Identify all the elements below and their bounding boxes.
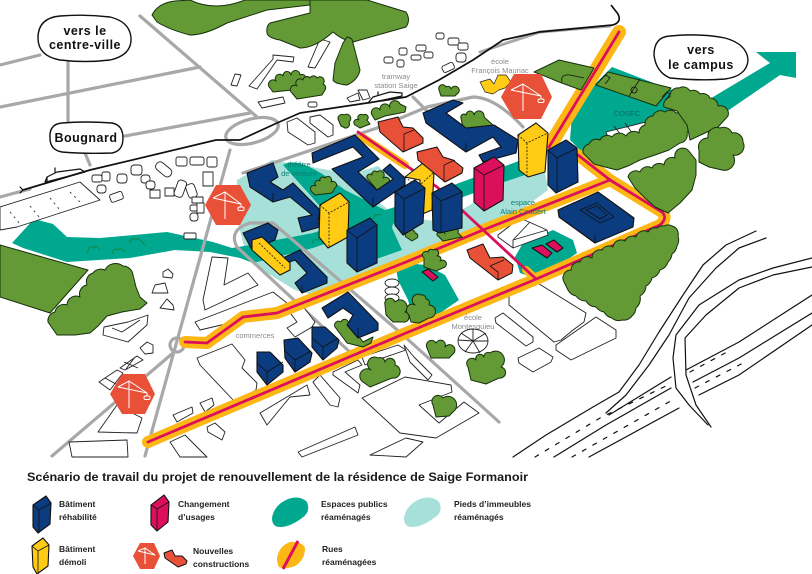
tree: foot of tower [405,230,418,241]
callout: vers le campus [654,35,748,80]
tree: beside low building [335,319,373,347]
legend: batiment rehabilite [33,496,97,533]
label: ecole Montesquieu: école [464,313,482,322]
tree: rail side 2 [354,114,370,128]
tree: north-west large mass [152,0,312,35]
crane hexagon north-east [501,74,552,119]
teal COSEC area [570,67,672,165]
house 3 [312,327,339,360]
legend: rues reamenagees: Rues [322,544,343,554]
navy rehabilitated buildings [243,100,634,385]
tree: north-east courtyard [461,111,493,135]
building: central S-block [312,135,405,207]
magenta small buildings [422,240,563,281]
building: south-west S block [285,250,327,293]
new construction middle [417,147,463,182]
building: south-west block [243,223,278,250]
railway line [23,5,619,190]
label: espace Alain Coudert: espace [511,198,535,207]
tower centre 3 [432,183,462,233]
tree: courtyard small [432,395,457,417]
label: espace Alain Coudert: Alain Coudert [500,207,547,216]
icon: umbrella school building [458,329,488,353]
tree: large north-east B [664,87,728,140]
teal arrow to campus [690,52,796,125]
parking dashes [10,192,82,224]
legend: changement d'usages [151,495,230,531]
teal stream arrow to the west [12,155,540,263]
orange new constructions [378,75,513,280]
crane hexagon west [205,185,251,225]
field markings [562,75,670,100]
sport field north-east [596,72,671,106]
tree: lower centre [385,298,409,322]
teal lower space [395,262,459,322]
tree: school south 2 [467,351,506,384]
tree: teal area [406,294,436,323]
label: tramway station: tramway [382,72,410,81]
tree: small north 1 [268,70,306,92]
legend: pieds d'immeubles: réaménagés [454,512,504,522]
tree: green block west [0,245,88,313]
label: commerces: commerces [236,331,275,340]
motorway lines [513,231,812,457]
legend: pieds d'immeubles [404,498,531,527]
tower centre 2 [395,180,425,235]
tree: large north-east D [628,148,696,213]
legend: changement d'usages: Changement [178,499,230,509]
icon: tram west [20,168,85,193]
icon: tram station [368,92,402,103]
legend [27,472,531,574]
legend: pieds d'immeubles: Pieds d’immeubles [454,499,531,509]
tower east [548,140,578,193]
legend: nouvelles constructions [133,543,249,569]
label: ecole Francois Mauriac: école [491,57,509,66]
legend: nouvelles constructions: constructions [193,559,249,569]
public spaces in teal [12,52,796,322]
callout: Bougnard: Bougnard [54,131,118,145]
legend: changement d'usages: d’usages [178,512,215,522]
legend: batiment rehabilite: Bâtiment [59,499,96,509]
tree: large north-east C [698,127,744,170]
tree: courtyard [367,171,390,190]
tree: large east E [563,225,679,321]
legend: rues reamenagees [277,541,377,569]
legend: espaces publics: Espaces publics [321,499,388,509]
navy towers [347,140,578,272]
tree: north stem [333,37,360,85]
legend: espaces publics [272,498,388,527]
tree: large north-east A [583,110,688,170]
square courtyard block [558,192,634,243]
magenta change of use tower [474,157,504,211]
yellow renovated streets [148,32,665,442]
grey road network [0,16,610,456]
demolished tower 2 [405,163,434,215]
demolished tower 3 [518,123,548,177]
callout: vers le campus: vers [687,43,715,57]
map [0,0,812,457]
legend: espaces publics: réaménagés [321,512,371,522]
label: COSEC: COSEC [614,109,641,118]
callout: vers le centre-ville: centre-ville [49,38,121,52]
new construction north [378,117,423,152]
building: central low block south [322,292,378,338]
house 2 [284,338,312,372]
demolished tower 1 [319,193,349,248]
tree: rail side 3 [371,101,406,120]
sport field arc [534,60,594,90]
legend: batiment demoli [32,538,96,574]
label: ecole Montesquieu: Montesquieu [452,322,494,331]
label: tramway station: station Saige [374,81,418,90]
legend: rues reamenagees: réaménagées [322,557,377,567]
callout: Bougnard [50,122,123,153]
tree: foot of tower 2 [437,228,462,241]
callout: vers le centre-ville: vers le [63,24,107,38]
teal area around theatre [283,162,402,262]
tree: theatre [310,176,337,195]
legend: batiment demoli: démoli [59,557,86,567]
tree: courtyard south [360,357,400,387]
green grass marks [87,214,381,254]
tower central [347,218,377,272]
white stacked small buildings [385,279,399,302]
new construction south [467,244,513,280]
tree: small north 2 [290,76,326,99]
demolished strip [252,237,290,275]
yellow demolished buildings and towers behind [252,123,548,275]
legend title: Scénario de travail du projet de renouvellement de la résidence de Saige Formanoir [27,472,529,484]
label: ecole Francois Mauriac: François Mauriac [471,66,529,75]
callout: vers le campus: le campus [668,58,734,72]
tree: school south 1 [426,340,455,358]
house 1 [257,352,283,385]
tree: rail side 1 [338,114,351,128]
school yellow small buildings [480,75,511,94]
panel: pieds d'immeubles pale teal area [236,160,548,297]
building: north-east S-block [423,100,518,162]
white existing buildings [0,33,646,457]
building: west S-block [247,163,320,232]
label: theatre de verdure: de verdure [281,169,317,178]
teal round square [515,230,577,279]
tree: street [422,249,446,271]
tree: west bush [48,263,147,335]
trees [0,0,744,417]
tree: north large mass [267,0,408,48]
legend: batiment demoli: Bâtiment [59,544,96,554]
crane hexagon south-west [110,374,155,414]
legend: nouvelles constructions: Nouvelles [193,546,233,556]
callout: vers le centre-ville [38,15,131,61]
tree: school bush [439,85,459,96]
legend: batiment rehabilite: réhabilité [59,512,97,522]
magenta street centre lines [148,32,665,442]
label: theatre de verdure: théâtre [287,160,311,169]
